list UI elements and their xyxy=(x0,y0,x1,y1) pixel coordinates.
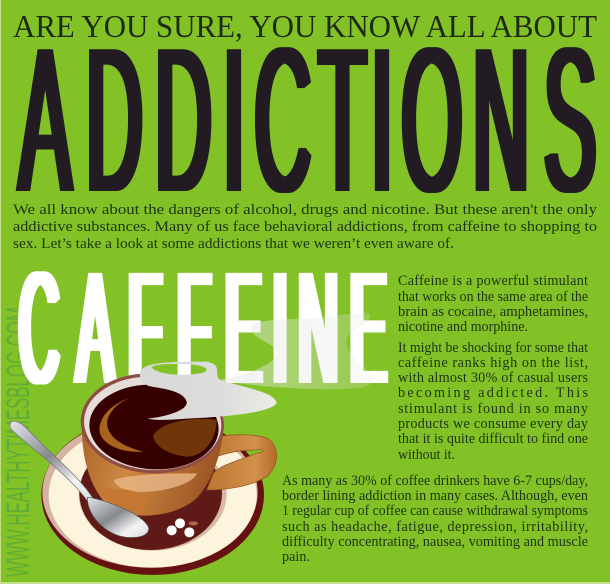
paragraph: ranking: becoming addicted. This xyxy=(398,385,588,401)
paragraph: stimulant xyxy=(398,273,588,335)
icon: saucer xyxy=(41,415,264,575)
paragraph: ranking: without it. xyxy=(398,447,455,463)
icon: cup handle xyxy=(207,435,277,490)
intro text xyxy=(13,202,598,252)
icon: cup rim xyxy=(78,370,227,477)
headline: ARE YOU SURE, YOU KNOW ALL ABOUT xyxy=(13,8,597,44)
paragraph: ranking: stimulant is found in so many xyxy=(398,401,589,417)
paragraph: withdrawal: As many as 30% of coffee drinkers have 6-7 cups/day, xyxy=(282,473,588,489)
paragraph: withdrawal: 1 regular cup of coffee can cause withdrawal symptoms xyxy=(282,503,588,519)
paragraph: withdrawal: such as headache, fatigue, depression, irritability, xyxy=(282,519,588,535)
paragraph: stimulant: nicotine and morphine. xyxy=(398,319,528,335)
title: addictions: ADDICTIONS xyxy=(19,6,596,236)
watermark url: WWW.HEALTHYTIMESBLOG.COM xyxy=(0,307,36,577)
icon: coffee xyxy=(87,381,221,473)
paragraph: stimulant: that works on the same area of the xyxy=(398,289,588,305)
paragraph: ranking xyxy=(398,340,589,463)
paragraph: ranking: It might be shocking for some that xyxy=(398,340,588,356)
steam: upper plume xyxy=(217,313,373,389)
article column xyxy=(282,273,589,565)
icon: spoon xyxy=(10,421,149,538)
intro text: We all know about the dangers of alcohol, drugs and nicotine. But these aren't the only xyxy=(13,202,598,218)
paragraph: ranking: products we consume every day xyxy=(398,416,589,432)
paragraph: stimulant: brain as cocaine, amphetamines, xyxy=(398,304,588,320)
paragraph: stimulant: Caffeine is a powerful stimulant xyxy=(398,273,588,289)
paragraph: withdrawal: pain. xyxy=(282,549,310,565)
steam: lower plume xyxy=(140,362,277,420)
paragraph: withdrawal xyxy=(282,473,588,565)
paragraph: withdrawal: border lining addiction in many cases. Although, even xyxy=(282,488,588,504)
icon: cup body xyxy=(82,423,224,516)
intro text: sex. Let’s take a look at some addictions that we weren’t even aware of. xyxy=(13,236,454,252)
intro text: addictive substances. Many of us face behavioral addictions, from caffeine to shopping to xyxy=(13,219,597,235)
paragraph: ranking: caffeine ranks high on the list, xyxy=(398,355,588,371)
coffee illustration xyxy=(10,313,373,575)
paragraph: ranking: with almost 30% of casual users xyxy=(398,370,588,386)
paragraph: withdrawal: difficulty concentrating, nausea, vomiting and muscle xyxy=(282,534,588,550)
paragraph: ranking: that it is quite difficult to find one xyxy=(398,431,588,447)
heading: caffeine: CAFFEINE xyxy=(19,240,387,418)
